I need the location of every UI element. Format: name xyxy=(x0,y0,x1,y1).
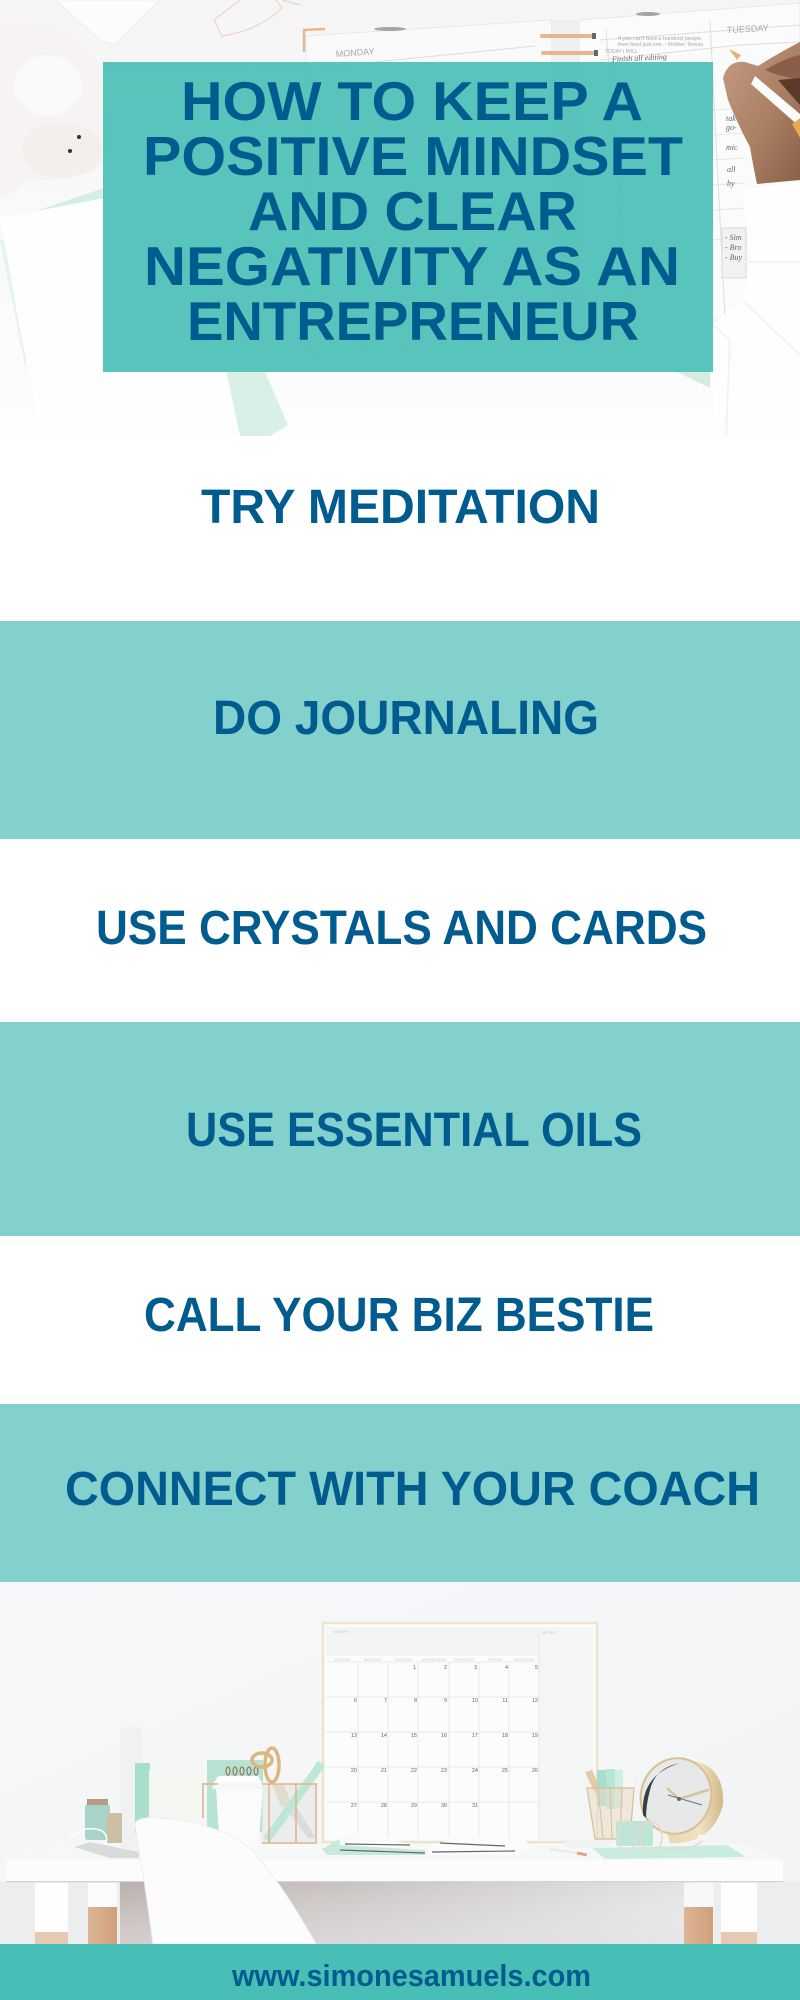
wall calendar: 6 xyxy=(354,1698,357,1704)
ceramic piggy bank xyxy=(0,21,106,195)
mint mat, mug, glasses and pencil xyxy=(550,1821,746,1859)
band: call your biz bestie xyxy=(0,1236,800,1404)
planner text: Finish all editing xyxy=(611,52,667,64)
white chair xyxy=(135,1818,316,1944)
wall calendar: TUESDAY xyxy=(394,1657,413,1662)
planner text: by xyxy=(727,179,735,188)
wall calendar: 12 xyxy=(532,1698,538,1704)
wall calendar: 25 xyxy=(502,1768,508,1774)
wall calendar: 19 xyxy=(532,1733,538,1739)
wall calendar: 21 xyxy=(381,1768,387,1774)
planner text: TUESDAY xyxy=(727,23,769,35)
title panel xyxy=(103,62,713,372)
footer bar: www.simonesamuels.com xyxy=(231,1958,591,1993)
band: use essential oils: USE ESSENTIAL OILS xyxy=(186,1104,642,1157)
hand writing with pen xyxy=(723,42,800,184)
band: use crystals and cards xyxy=(0,839,800,1022)
mint paper and white notebook xyxy=(0,188,710,436)
wall calendar: 18 xyxy=(502,1733,508,1739)
band: use essential oils xyxy=(0,1022,800,1236)
wall calendar: THURSDAY xyxy=(453,1657,475,1662)
wall calendar: 10 xyxy=(472,1698,478,1704)
left desk items xyxy=(70,1727,202,1858)
wall calendar: 7 xyxy=(384,1698,387,1704)
wall calendar: 1 xyxy=(413,1665,416,1671)
wall calendar: 27 xyxy=(351,1803,357,1809)
white stacked books xyxy=(565,1833,610,1847)
wall calendar: 9 xyxy=(444,1698,447,1704)
footer bar xyxy=(0,1944,800,2000)
wall calendar: 2 xyxy=(444,1665,447,1671)
wall calendar: 15 xyxy=(411,1733,417,1739)
planner text: MONDAY xyxy=(335,46,375,59)
wall calendar: 8 xyxy=(414,1698,417,1704)
wall calendar: WEDNESDAY xyxy=(421,1657,447,1662)
wall calendar: FRIDAY xyxy=(488,1657,503,1662)
wall calendar: 13 xyxy=(351,1733,357,1739)
mint notebook, cup, scissors and gold box xyxy=(203,1748,325,1850)
planner text: - Sim xyxy=(725,233,742,242)
pen cup xyxy=(585,1769,634,1839)
wall calendar: 23 xyxy=(441,1768,447,1774)
wall calendar: 26 xyxy=(532,1768,538,1774)
planner pages xyxy=(306,3,800,360)
planner text: then feed just one. - Mother Teresa xyxy=(618,42,704,48)
wall calendar: 3 xyxy=(474,1665,477,1671)
planner text: mic xyxy=(726,143,738,152)
wall calendar: NOTES xyxy=(542,1630,556,1635)
planner text xyxy=(335,23,769,262)
glasses xyxy=(214,0,300,36)
shaded wall under desk xyxy=(0,1882,800,1944)
gold desk clock xyxy=(631,1749,723,1849)
open book xyxy=(322,1834,530,1855)
marble block, top left xyxy=(55,0,160,45)
title text: NEGATIVITY AS AN xyxy=(144,235,680,297)
wall calendar: 11 xyxy=(502,1698,508,1704)
wall calendar: 17 xyxy=(472,1733,478,1739)
band: do journaling: DO JOURNALING xyxy=(213,692,599,745)
title text: AND CLEAR xyxy=(248,180,577,242)
wall calendar: 28 xyxy=(381,1803,387,1809)
wall calendar: 16 xyxy=(441,1733,447,1739)
wall calendar: MONTH xyxy=(334,1629,349,1634)
wall calendar: MONDAY xyxy=(364,1657,382,1662)
wall calendar: 5 xyxy=(535,1665,538,1671)
wall calendar: 30 xyxy=(441,1803,447,1809)
planner text: all xyxy=(727,165,736,174)
planner text: - Buy xyxy=(725,253,743,262)
desk surface and legs xyxy=(6,1844,783,1944)
hero photo: planner flat lay xyxy=(0,0,800,436)
title text: POSITIVE MINDSET xyxy=(143,125,683,187)
planner text: tak xyxy=(726,114,736,123)
desk photo xyxy=(0,1582,800,1944)
band: connect with your coach: CONNECT WITH YOUR COACH xyxy=(65,1463,760,1516)
title text: ENTREPRENEUR xyxy=(187,290,639,352)
wall calendar: 4 xyxy=(505,1665,508,1671)
wall calendar: 31 xyxy=(472,1803,478,1809)
band: call your biz bestie: CALL YOUR BIZ BESTIE xyxy=(144,1289,654,1342)
wall calendar: 14 xyxy=(381,1733,387,1739)
band: try meditation: TRY MEDITATION xyxy=(201,481,600,534)
planner text: If you can't feed a hundred people, xyxy=(618,36,703,42)
band: connect with your coach xyxy=(0,1404,800,1582)
band: try meditation xyxy=(0,436,800,621)
wall calendar: SATURDAY xyxy=(514,1657,536,1662)
wall calendar: SUNDAY xyxy=(334,1657,351,1662)
wall calendar xyxy=(323,1623,597,1842)
band: use crystals and cards: USE CRYSTALS AND CARDS xyxy=(96,902,707,955)
planner text: go- xyxy=(726,123,737,132)
planner text: TODAY I WILL xyxy=(605,49,638,55)
band: do journaling xyxy=(0,621,800,839)
wall calendar: 24 xyxy=(472,1768,478,1774)
wall calendar: 22 xyxy=(411,1768,417,1774)
white shirt sleeve xyxy=(713,182,800,436)
title text: HOW TO KEEP A xyxy=(181,70,643,132)
gold planner rings and corner xyxy=(304,12,660,56)
title text xyxy=(143,70,683,352)
planner text: - Bro xyxy=(725,243,741,252)
wall calendar: 29 xyxy=(411,1803,417,1809)
wall calendar: 20 xyxy=(351,1768,357,1774)
